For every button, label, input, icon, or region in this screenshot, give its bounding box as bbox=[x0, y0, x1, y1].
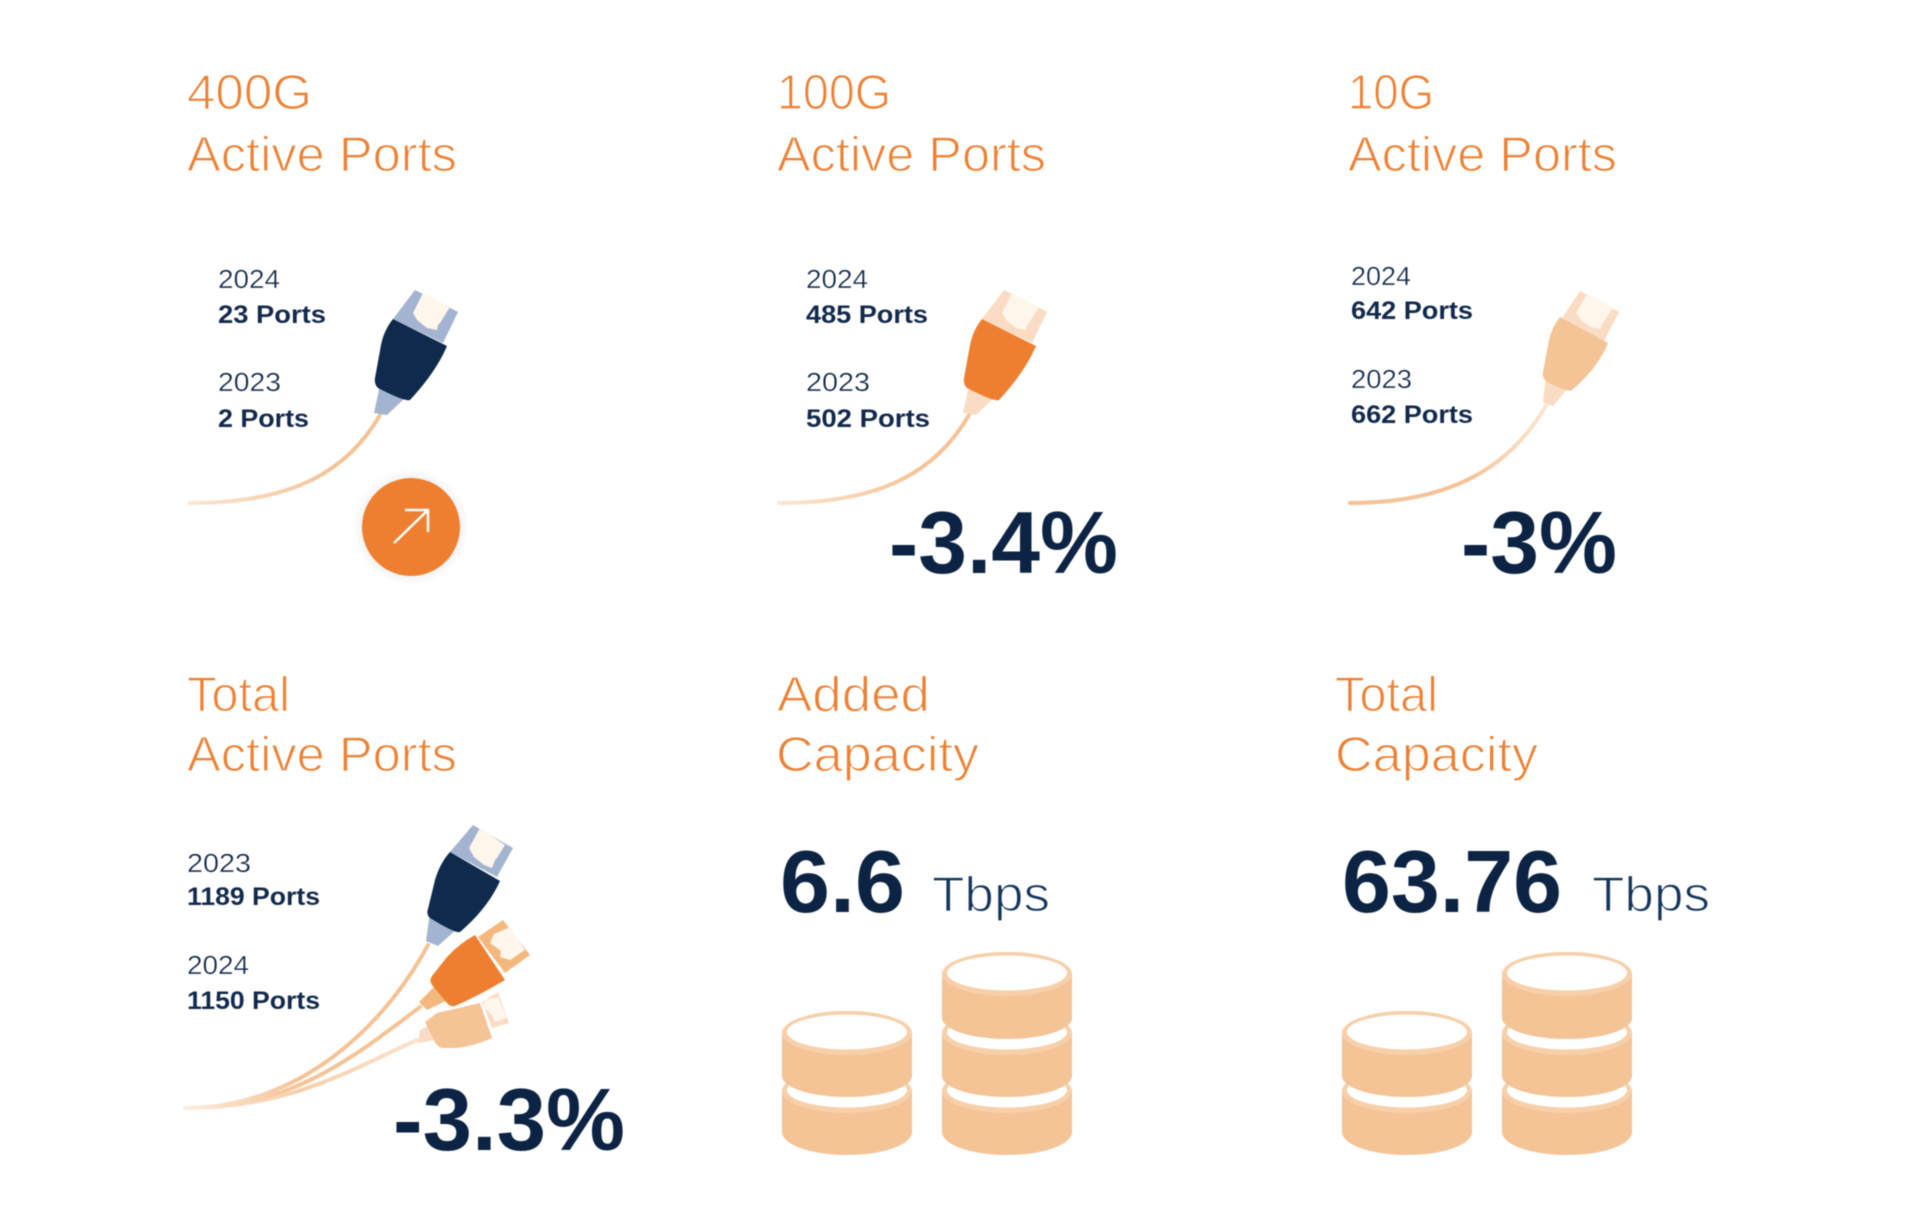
heading: 10G Active Ports: 10G bbox=[1348, 66, 1434, 120]
port figures: 2023 bbox=[1351, 364, 1412, 394]
heading: Total Capacity bbox=[1335, 668, 1539, 782]
heading: 400G Active Ports: 400G bbox=[187, 66, 312, 120]
port figures bbox=[806, 264, 930, 433]
icon: database stacks bbox=[1342, 952, 1632, 1155]
heading: Total Capacity: Capacity bbox=[1335, 728, 1539, 782]
panel: total active ports bbox=[185, 668, 625, 1169]
change: -3.4%: -3.4% bbox=[889, 493, 1118, 592]
heading: 400G Active Ports bbox=[187, 66, 457, 182]
port figures: 2023 bbox=[806, 367, 870, 397]
heading: 400G Active Ports: Active Ports bbox=[187, 128, 457, 182]
heading: Added Capacity: Capacity bbox=[776, 728, 980, 782]
value: 63.76 Tbps: 63.76 bbox=[1342, 832, 1562, 931]
heading: 100G Active Ports: 100G bbox=[777, 66, 891, 120]
icon: database stacks bbox=[782, 952, 1072, 1155]
panel: 400G active ports bbox=[187, 66, 469, 585]
port figures: 23 Ports bbox=[218, 301, 326, 329]
heading: Added Capacity: Added bbox=[777, 668, 930, 722]
heading: 100G Active Ports bbox=[777, 66, 1046, 182]
value: 6.6 Tbps: Tbps bbox=[932, 868, 1050, 922]
port figures bbox=[187, 848, 320, 1015]
icon: orange circle with up arrow bbox=[353, 469, 469, 585]
value: 63.76 Tbps: Tbps bbox=[1592, 868, 1710, 922]
heading: 10G Active Ports: Active Ports bbox=[1348, 128, 1617, 182]
icon: orange network plug with cable bbox=[779, 290, 1047, 503]
port figures: 642 Ports bbox=[1351, 297, 1473, 325]
heading: Added Capacity bbox=[776, 668, 980, 782]
value: 6.6 Tbps bbox=[780, 832, 1050, 931]
port figures: 2024 bbox=[187, 950, 249, 980]
panel: 10G active ports bbox=[1348, 66, 1619, 592]
heading: 10G Active Ports bbox=[1348, 66, 1617, 182]
value: 6.6 Tbps: 6.6 bbox=[780, 832, 905, 931]
port figures: 502 Ports bbox=[806, 405, 930, 433]
icon: navy network plug with cable bbox=[190, 290, 458, 503]
port figures: 2024 bbox=[218, 264, 280, 294]
panel: 100G active ports bbox=[777, 66, 1118, 592]
heading: Total Active Ports: Total bbox=[187, 668, 290, 722]
heading: 100G Active Ports: Active Ports bbox=[777, 128, 1046, 182]
icon: peach network plug with cable bbox=[1350, 291, 1619, 503]
port figures: 485 Ports bbox=[806, 301, 928, 329]
value: 63.76 Tbps bbox=[1342, 832, 1710, 931]
port figures bbox=[218, 264, 326, 433]
heading: Total Active Ports bbox=[187, 668, 457, 782]
port figures: 1189 Ports bbox=[187, 883, 320, 911]
panel: total capacity bbox=[1335, 668, 1710, 1155]
panel: added capacity bbox=[776, 668, 1072, 1155]
port figures: 2024 bbox=[806, 264, 868, 294]
port figures bbox=[1351, 261, 1473, 429]
change: -3%: -3% bbox=[1461, 493, 1617, 592]
port figures: 1150 Ports bbox=[187, 987, 320, 1015]
port figures: 2023 bbox=[218, 367, 281, 397]
heading: Total Capacity: Total bbox=[1335, 668, 1438, 722]
port figures: 2023 bbox=[187, 848, 251, 878]
icon: three network plugs with merged cables bbox=[185, 825, 530, 1108]
heading: Total Active Ports: Active Ports bbox=[187, 728, 457, 782]
change: -3.3%: -3.3% bbox=[393, 1070, 625, 1169]
port figures: 2024 bbox=[1351, 261, 1411, 291]
port figures: 662 Ports bbox=[1351, 401, 1473, 429]
port figures: 2 Ports bbox=[218, 405, 309, 433]
